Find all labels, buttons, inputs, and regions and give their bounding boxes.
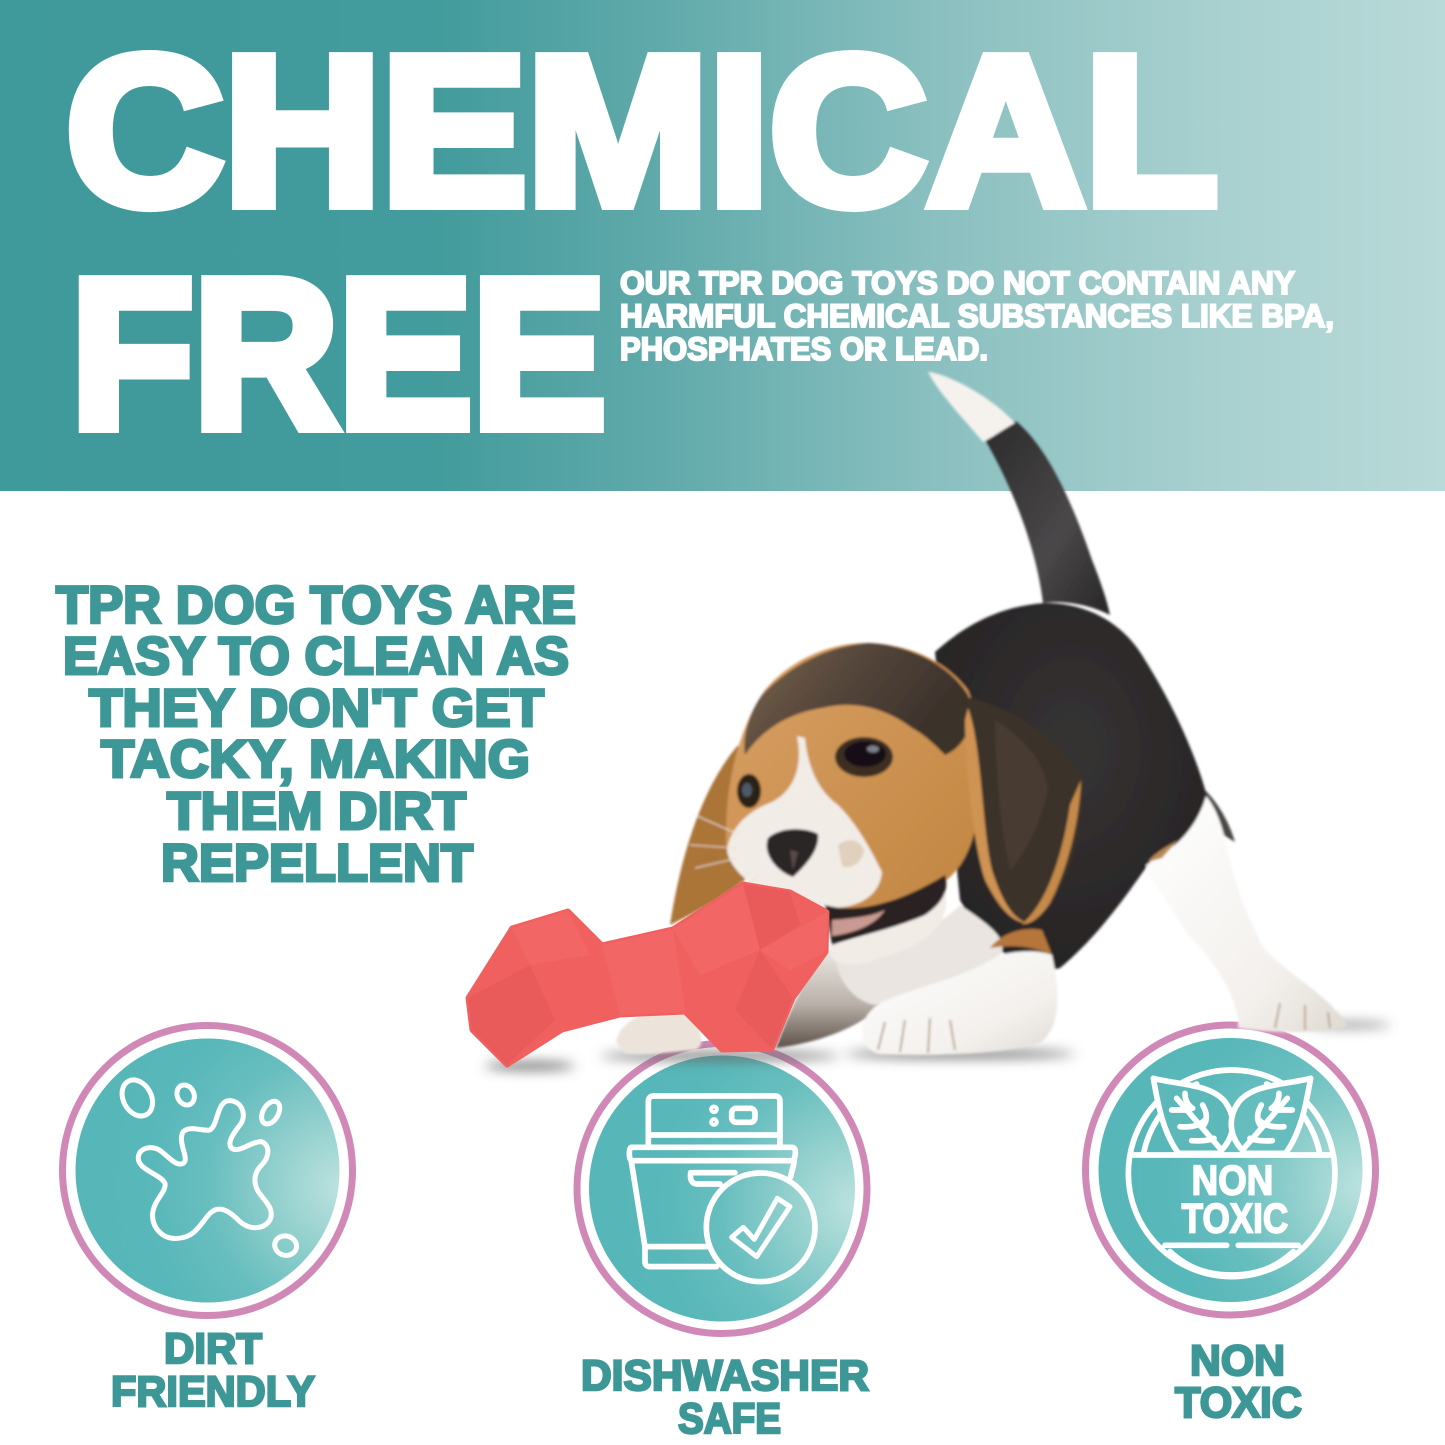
ground shadows <box>485 1022 1390 1070</box>
teal body statement: TACKY, MAKING <box>101 730 530 789</box>
right ear <box>958 695 1082 924</box>
whiskers <box>690 815 760 905</box>
body <box>935 603 1208 970</box>
label: dishwasher safe: DISHWASHER <box>581 1352 869 1400</box>
red toy <box>468 884 827 1065</box>
label: dirt friendly: FRIENDLY <box>111 1368 315 1416</box>
hip dark edge <box>1205 790 1235 842</box>
label: dirt friendly <box>111 1325 315 1416</box>
underbody <box>776 950 900 1048</box>
front right leg <box>862 951 1057 1055</box>
left ear <box>670 745 745 925</box>
teal body statement: THEY DON'T GET <box>89 679 544 738</box>
mouth and lower jaw <box>825 875 946 964</box>
teal body statement <box>56 576 576 893</box>
badge: dirt friendly <box>62 1026 352 1316</box>
badge: non toxic <box>1086 1025 1376 1315</box>
icon: dishwasher with check <box>629 1096 815 1282</box>
header description text <box>620 265 1334 367</box>
white muzzle blaze <box>727 736 882 908</box>
header description text: HARMFUL CHEMICAL SUBSTANCES LIKE BPA, <box>620 298 1334 334</box>
label: non toxic <box>1175 1337 1302 1427</box>
hind toes <box>1275 1003 1330 1030</box>
muzzle freckles <box>838 840 864 867</box>
label: dirt friendly: DIRT <box>164 1325 262 1373</box>
puppy biting red toy <box>468 372 1390 1070</box>
title: chemical free: CHEMICAL <box>66 12 1218 249</box>
header banner <box>0 0 1445 491</box>
icon: non toxic seal <box>1128 1070 1335 1277</box>
left eye <box>737 774 761 808</box>
icon: dirt splat <box>116 1075 299 1258</box>
teal body statement: REPELLENT <box>161 834 473 893</box>
front right toes <box>878 1018 955 1053</box>
label: non toxic: TOXIC <box>1175 1379 1302 1427</box>
right eye <box>835 737 893 777</box>
icon: non toxic seal: TOXIC <box>1182 1196 1288 1242</box>
teal body statement: THEM DIRT <box>167 782 466 841</box>
front left paw <box>616 1012 701 1054</box>
title: chemical free: FREE <box>71 235 606 472</box>
header description text: OUR TPR DOG TOYS DO NOT CONTAIN ANY <box>620 265 1295 301</box>
hind leg tan mark <box>1148 840 1178 862</box>
icon: non toxic seal: NON <box>1192 1157 1273 1203</box>
chest tan patch <box>990 929 1052 955</box>
badge: dishwasher safe <box>577 1044 867 1334</box>
label: dishwasher safe: SAFE <box>678 1395 781 1443</box>
teal body statement: TPR DOG TOYS ARE <box>56 576 576 635</box>
label: dishwasher safe <box>581 1352 869 1443</box>
label: non toxic: NON <box>1190 1337 1285 1385</box>
puppy <box>616 372 1348 1055</box>
head <box>726 643 983 909</box>
toy facets <box>512 884 827 1015</box>
tail <box>928 372 1110 615</box>
title: chemical free <box>66 12 1218 472</box>
teal body statement: EASY TO CLEAN AS <box>63 627 569 686</box>
nose <box>767 829 818 877</box>
hind leg <box>1146 796 1348 1032</box>
head dark fur <box>744 643 971 755</box>
chest <box>835 905 1003 1005</box>
header description text: PHOSPHATES OR LEAD. <box>620 331 988 367</box>
